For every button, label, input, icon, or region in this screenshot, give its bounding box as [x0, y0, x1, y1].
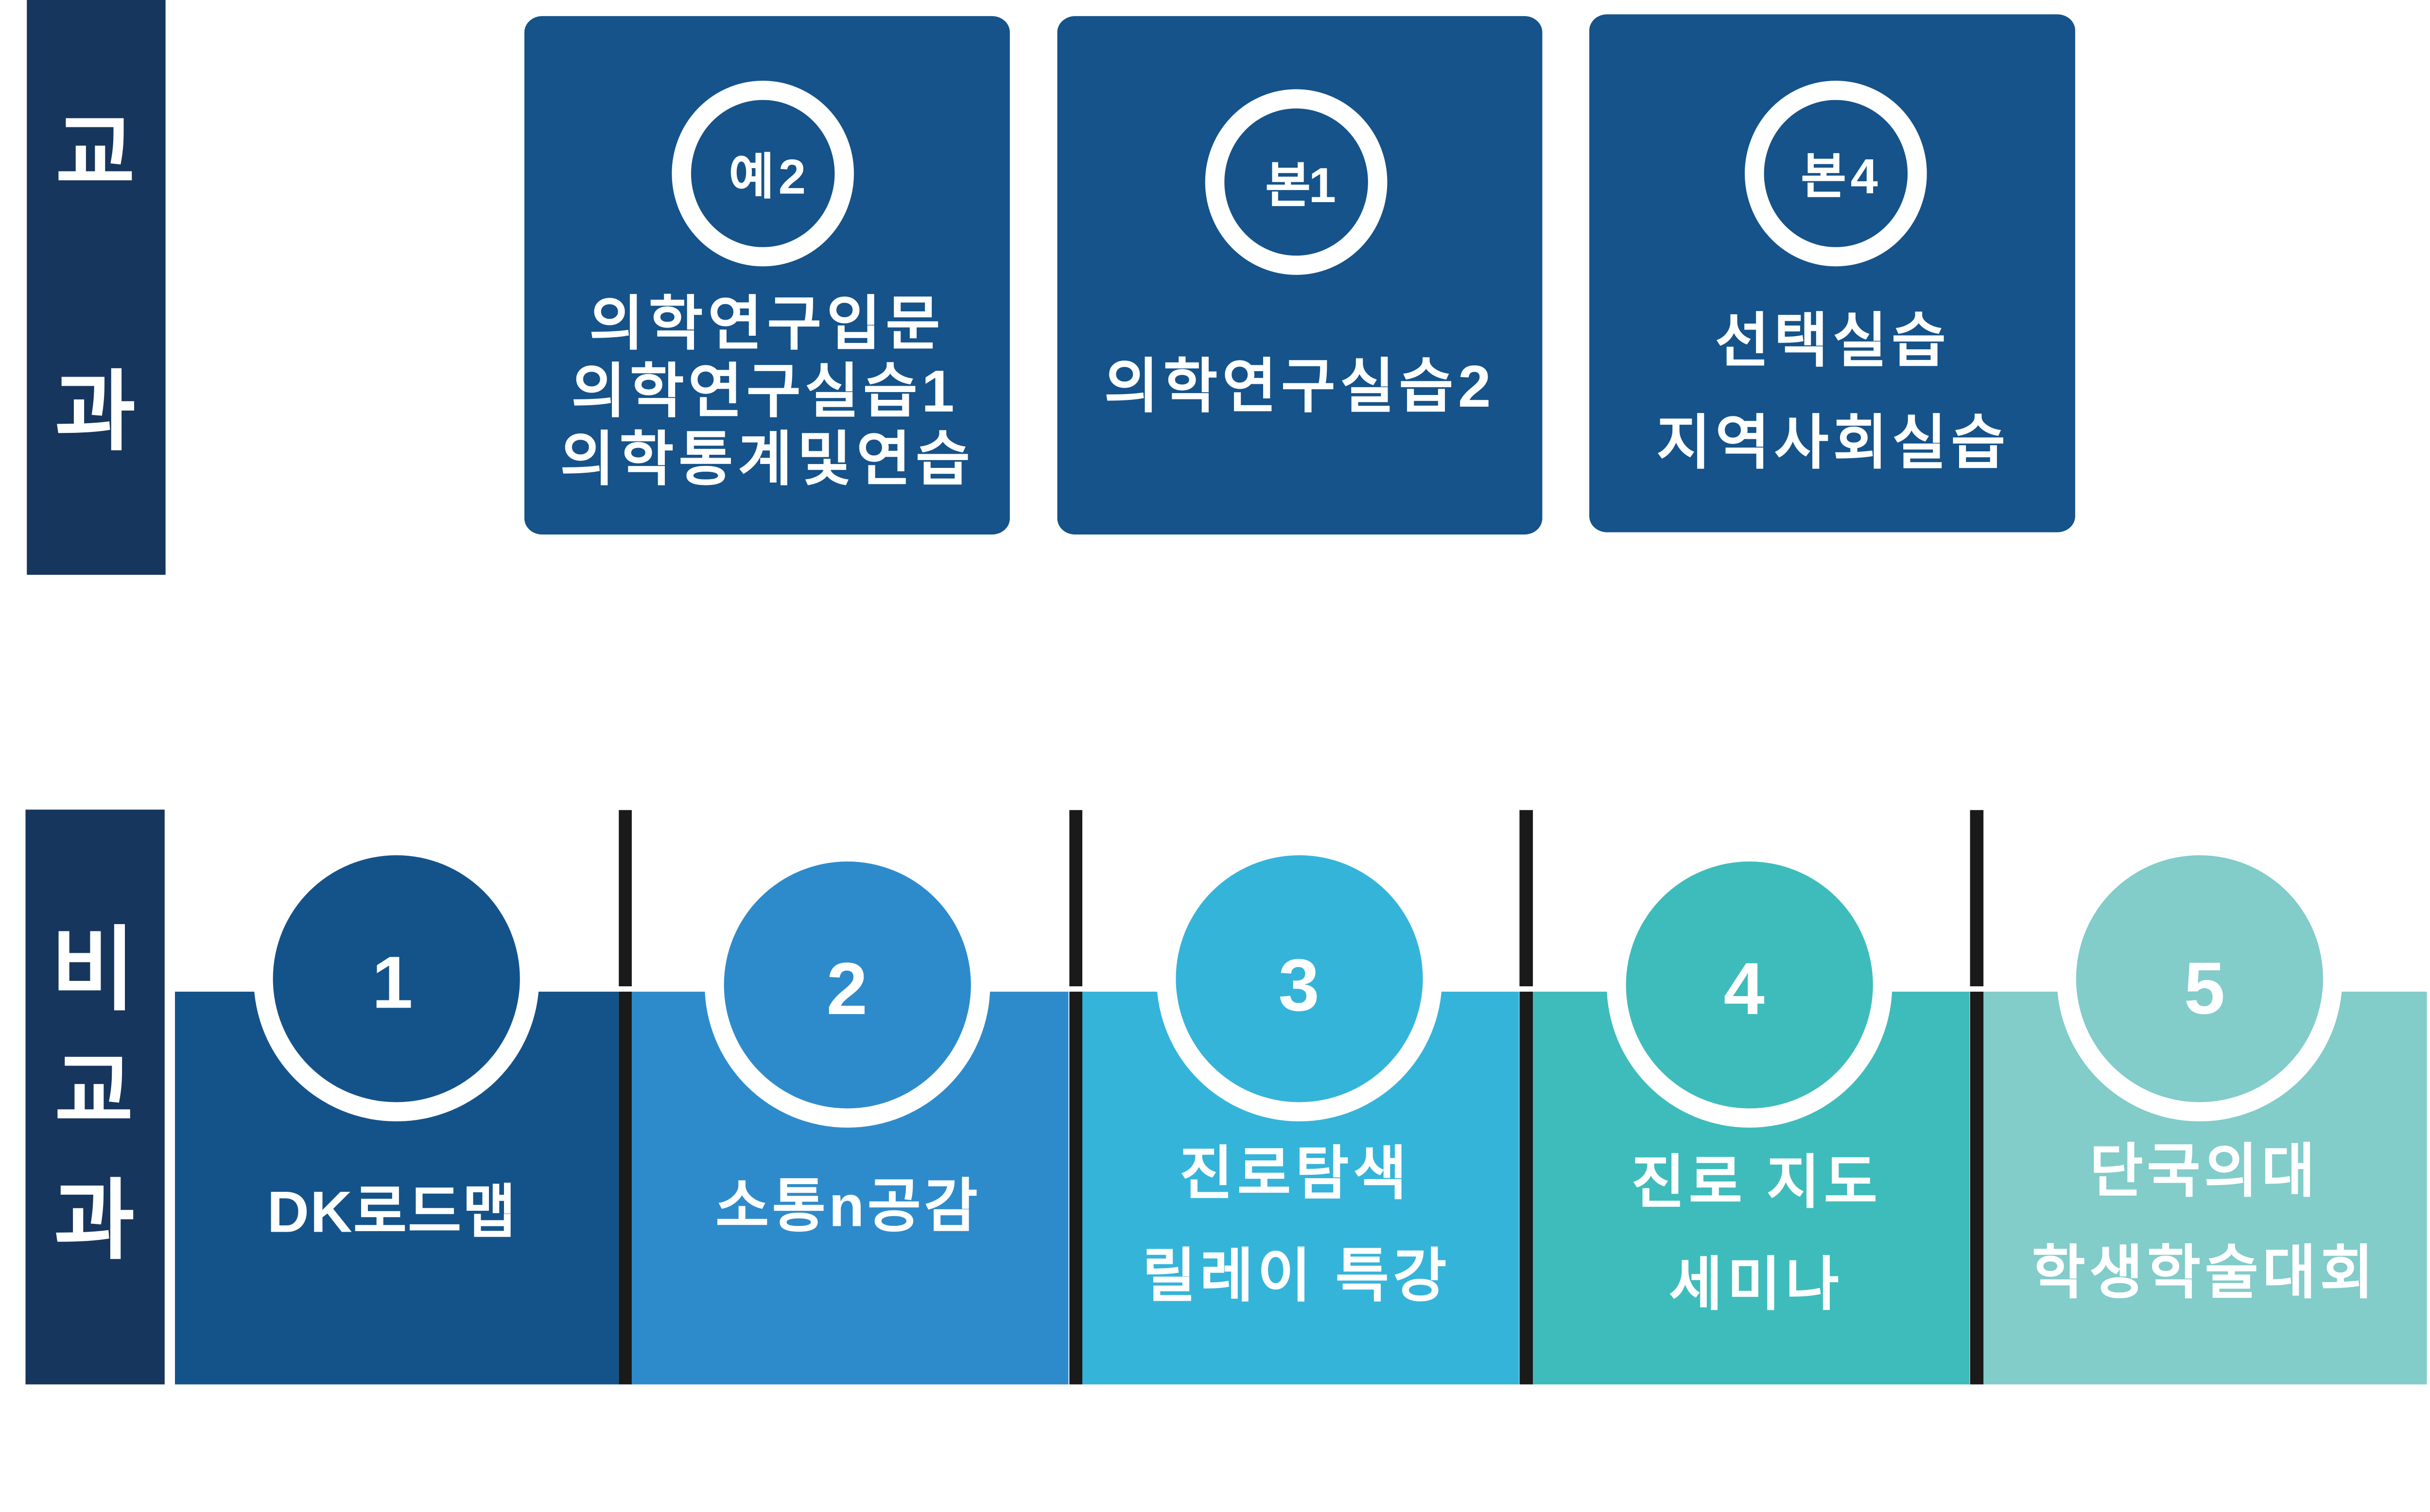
- sidebar label: 비: 비: [51, 895, 135, 1028]
- step circle: 5: 5: [2184, 947, 2225, 1030]
- sidebar label: 과: 과: [54, 1150, 135, 1276]
- badge label: 본1: 본1: [1266, 146, 1336, 217]
- card text: 선택실습 / 지역사회실습: 지역사회실습: [1656, 395, 2005, 480]
- card text: 의학연구입문 / 의학연구실습1 / 의학통계및연습: [560, 275, 970, 497]
- badge label: 예2: 예2: [729, 137, 806, 208]
- step text: DK로드맵: DK로드맵: [267, 1165, 516, 1249]
- step circle: 1: [273, 855, 520, 1102]
- panel: step 2 소통n공감: [632, 842, 1068, 1384]
- panel: step 5 단국의대 학생학술대회: [1983, 836, 2427, 1384]
- step circle: 3: [1176, 855, 1423, 1102]
- badge ring: 예2: [681, 90, 844, 257]
- step text: 진로탐색 / 릴레이 특강: [1142, 1126, 1446, 1313]
- step circle: 2: [724, 861, 971, 1108]
- panel: step 1 DK로드맵: [175, 836, 619, 1384]
- sidebar: 비교과: [25, 809, 165, 1384]
- panel: 본4 card: [1589, 14, 2075, 533]
- sidebar label: 교: 교: [56, 84, 135, 208]
- card text: 의학연구실습2: 의학연구실습2: [1104, 338, 1491, 424]
- step text: 진로 지도 / 세미나: [1632, 1135, 1877, 1322]
- step circle: 4: [1626, 861, 1873, 1108]
- badge label: 본4: 본4: [1801, 137, 1878, 208]
- sidebar label: 과: 과: [55, 341, 136, 467]
- panel: step 3 진로탐색 릴레이 특강: [1082, 836, 1519, 1384]
- sidebar label: 교: 교: [55, 1023, 133, 1146]
- step text: 단국의대 / 학생학술대회: 단국의대: [2089, 1124, 2315, 1208]
- card text: 선택실습 / 지역사회실습: [1656, 292, 2005, 480]
- card text: 의학연구입문 / 의학연구실습1 / 의학통계및연습: 의학연구실습1: [572, 343, 955, 429]
- step text: 소통n공감: 소통n공감: [715, 1159, 978, 1243]
- dividers: [619, 810, 1983, 1384]
- card text: 의학연구입문 / 의학연구실습1 / 의학통계및연습: 의학연구입문: [589, 275, 940, 361]
- step text: 단국의대 / 학생학술대회: 학생학술대회: [2032, 1226, 2374, 1310]
- step text: 진로 지도 / 세미나: 세미나: [1669, 1237, 1839, 1322]
- step text: 진로 지도 / 세미나: 진로 지도: [1632, 1135, 1877, 1220]
- panel: step 4 진로 지도 세미나: [1533, 842, 1970, 1384]
- panel: 예2 card: [524, 16, 1010, 534]
- badge ring: 본1: [1215, 99, 1378, 265]
- step circle: 5: [2076, 855, 2323, 1102]
- step text: 진로탐색 / 릴레이 특강: 릴레이 특강: [1142, 1229, 1446, 1313]
- card text: 의학연구입문 / 의학연구실습1 / 의학통계및연습: 의학통계및연습: [560, 411, 970, 497]
- step circle: 2: 2: [827, 947, 868, 1030]
- step circle: 4: 4: [1723, 947, 1765, 1030]
- sidebar: 교과: [27, 0, 166, 575]
- step text: 진로탐색 / 릴레이 특강: 진로탐색: [1180, 1126, 1406, 1210]
- panel: 본1 card: [1057, 16, 1542, 534]
- step circle: 1: 1: [372, 941, 413, 1024]
- step text: 단국의대 / 학생학술대회: [2032, 1124, 2374, 1310]
- step circle: 3: 3: [1278, 944, 1319, 1027]
- badge ring: 본4: [1754, 90, 1917, 257]
- card text: 선택실습 / 지역사회실습: 선택실습: [1715, 292, 1946, 378]
